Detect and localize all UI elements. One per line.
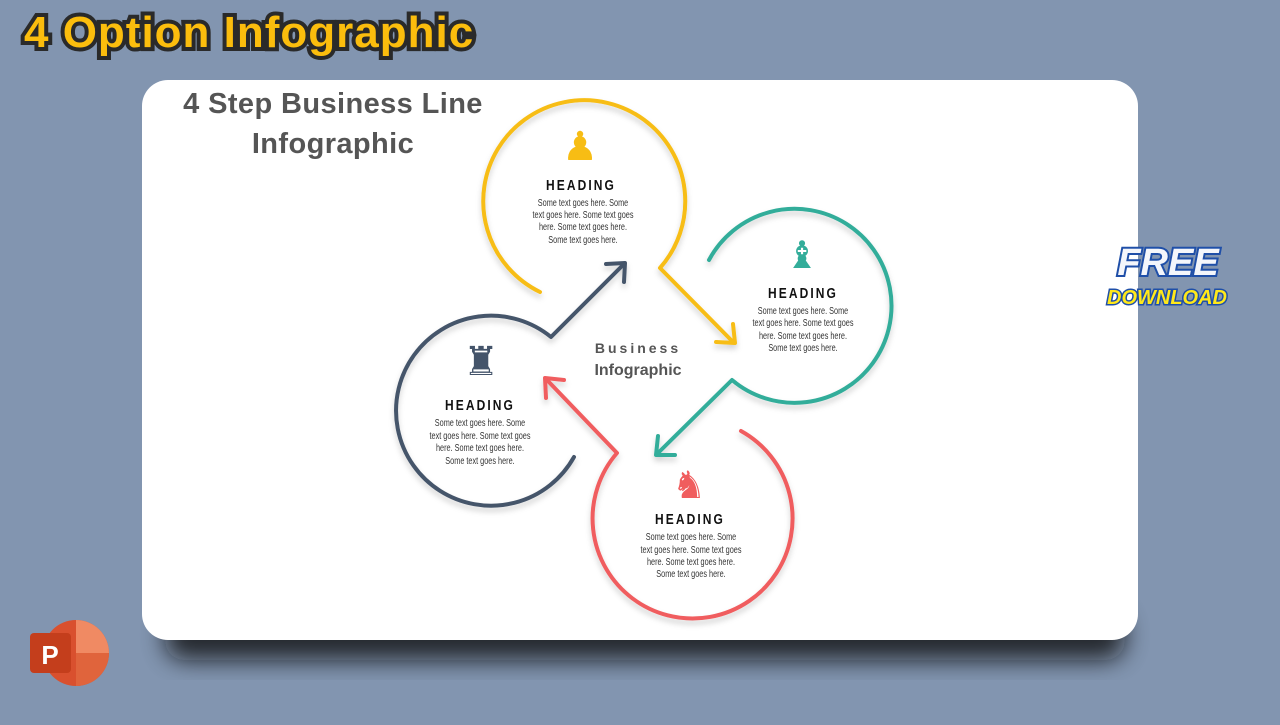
icon: pawn: ♟ — [562, 125, 598, 169]
step 1 content — [533, 125, 634, 245]
step 2 content: Some text goes here. Some — [758, 305, 848, 316]
icon: powerpoint logo: P — [41, 640, 59, 670]
step 4 content: here. Some text goes here. — [436, 442, 524, 453]
step 3 content: HEADING — [655, 511, 725, 527]
step 1 content: Some text goes here. — [548, 234, 618, 245]
step 2 content — [753, 235, 854, 353]
step 1: yellow circle arrow — [483, 100, 735, 343]
step 1 content: text goes here. Some text goes — [533, 209, 634, 220]
step 4 content: Some text goes here. — [445, 455, 515, 466]
free download badge: DOWNLOAD — [1107, 287, 1227, 309]
main title: 4 Option Infographic — [24, 8, 474, 57]
step 2 content: here. Some text goes here. — [759, 330, 847, 341]
step 2 content: Some text goes here. — [768, 342, 838, 353]
slide title — [183, 88, 483, 160]
step 3: red circle arrow — [545, 378, 793, 618]
icon: bishop: ♝ — [785, 235, 819, 277]
slide title: Infographic — [252, 128, 414, 160]
card shadow — [165, 610, 1125, 660]
icon: knight: ♞ — [672, 465, 706, 507]
step 2 content: HEADING — [768, 285, 838, 301]
slide title: 4 Step Business Line — [183, 88, 483, 120]
step 4 content: text goes here. Some text goes — [430, 430, 531, 441]
step 2: teal circle arrow — [656, 209, 891, 455]
step 3 content: here. Some text goes here. — [647, 556, 735, 567]
step 1 content: HEADING — [546, 177, 616, 193]
step 1 content: here. Some text goes here. — [539, 221, 627, 232]
icon: powerpoint logo — [30, 620, 109, 686]
icon: rook: ♜ — [463, 340, 499, 384]
center label: Infographic — [594, 362, 682, 379]
step 3 content: Some text goes here. Some — [646, 531, 736, 542]
center label — [594, 340, 682, 379]
step 4 content: Some text goes here. Some — [435, 417, 525, 428]
step 3 content — [641, 465, 742, 579]
step 3 content: text goes here. Some text goes — [641, 544, 742, 555]
step 4: dark circle arrow — [396, 263, 625, 506]
free download badge: FREE — [1117, 242, 1220, 284]
step 4 content: HEADING — [445, 397, 515, 413]
step 4 content — [430, 340, 531, 466]
card — [142, 80, 1138, 640]
step 1 content: Some text goes here. Some — [538, 197, 628, 208]
free download badge — [1107, 242, 1227, 309]
center label: Business — [595, 340, 681, 356]
step 3 content: Some text goes here. — [656, 568, 726, 579]
step 2 content: text goes here. Some text goes — [753, 317, 854, 328]
